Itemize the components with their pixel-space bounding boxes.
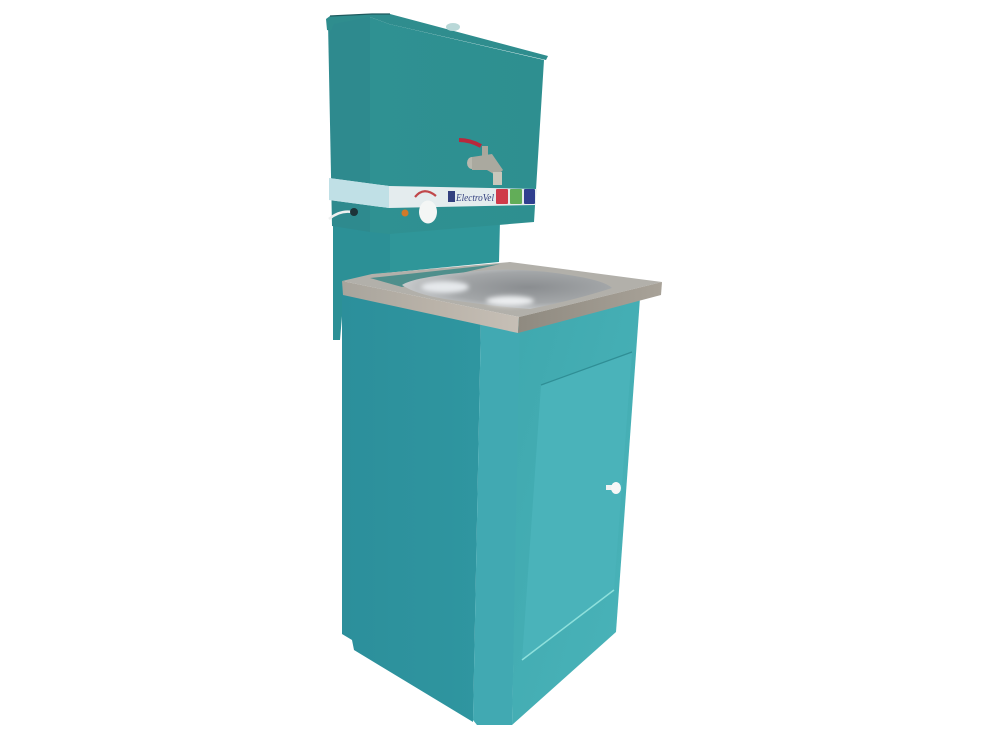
temperature knob [419,200,437,224]
cabinet [342,285,640,725]
badge: green [510,189,522,204]
back panel [333,220,500,340]
sink top [342,262,662,317]
brand logo [448,191,455,202]
badge: blue [524,189,535,204]
cabinet front face [512,298,640,725]
sink basin [402,270,612,309]
sink right rim [518,282,662,333]
water tap [459,140,503,185]
badge: red [496,189,508,204]
indicator lamp [402,210,408,216]
temperature scale [415,191,436,197]
tank lid [326,14,548,60]
tank side face [328,16,370,232]
cabinet corner strip [473,318,522,725]
sink left rim [342,281,519,333]
label band [329,178,537,208]
cabinet door [522,352,632,660]
brand name: ElectroVel [455,193,494,204]
tank front face [370,17,544,234]
filler cap [446,23,460,31]
door knob [606,482,621,494]
sink [342,262,662,333]
cabinet left face [342,285,481,722]
power cable [329,208,358,219]
water tank [326,14,548,234]
